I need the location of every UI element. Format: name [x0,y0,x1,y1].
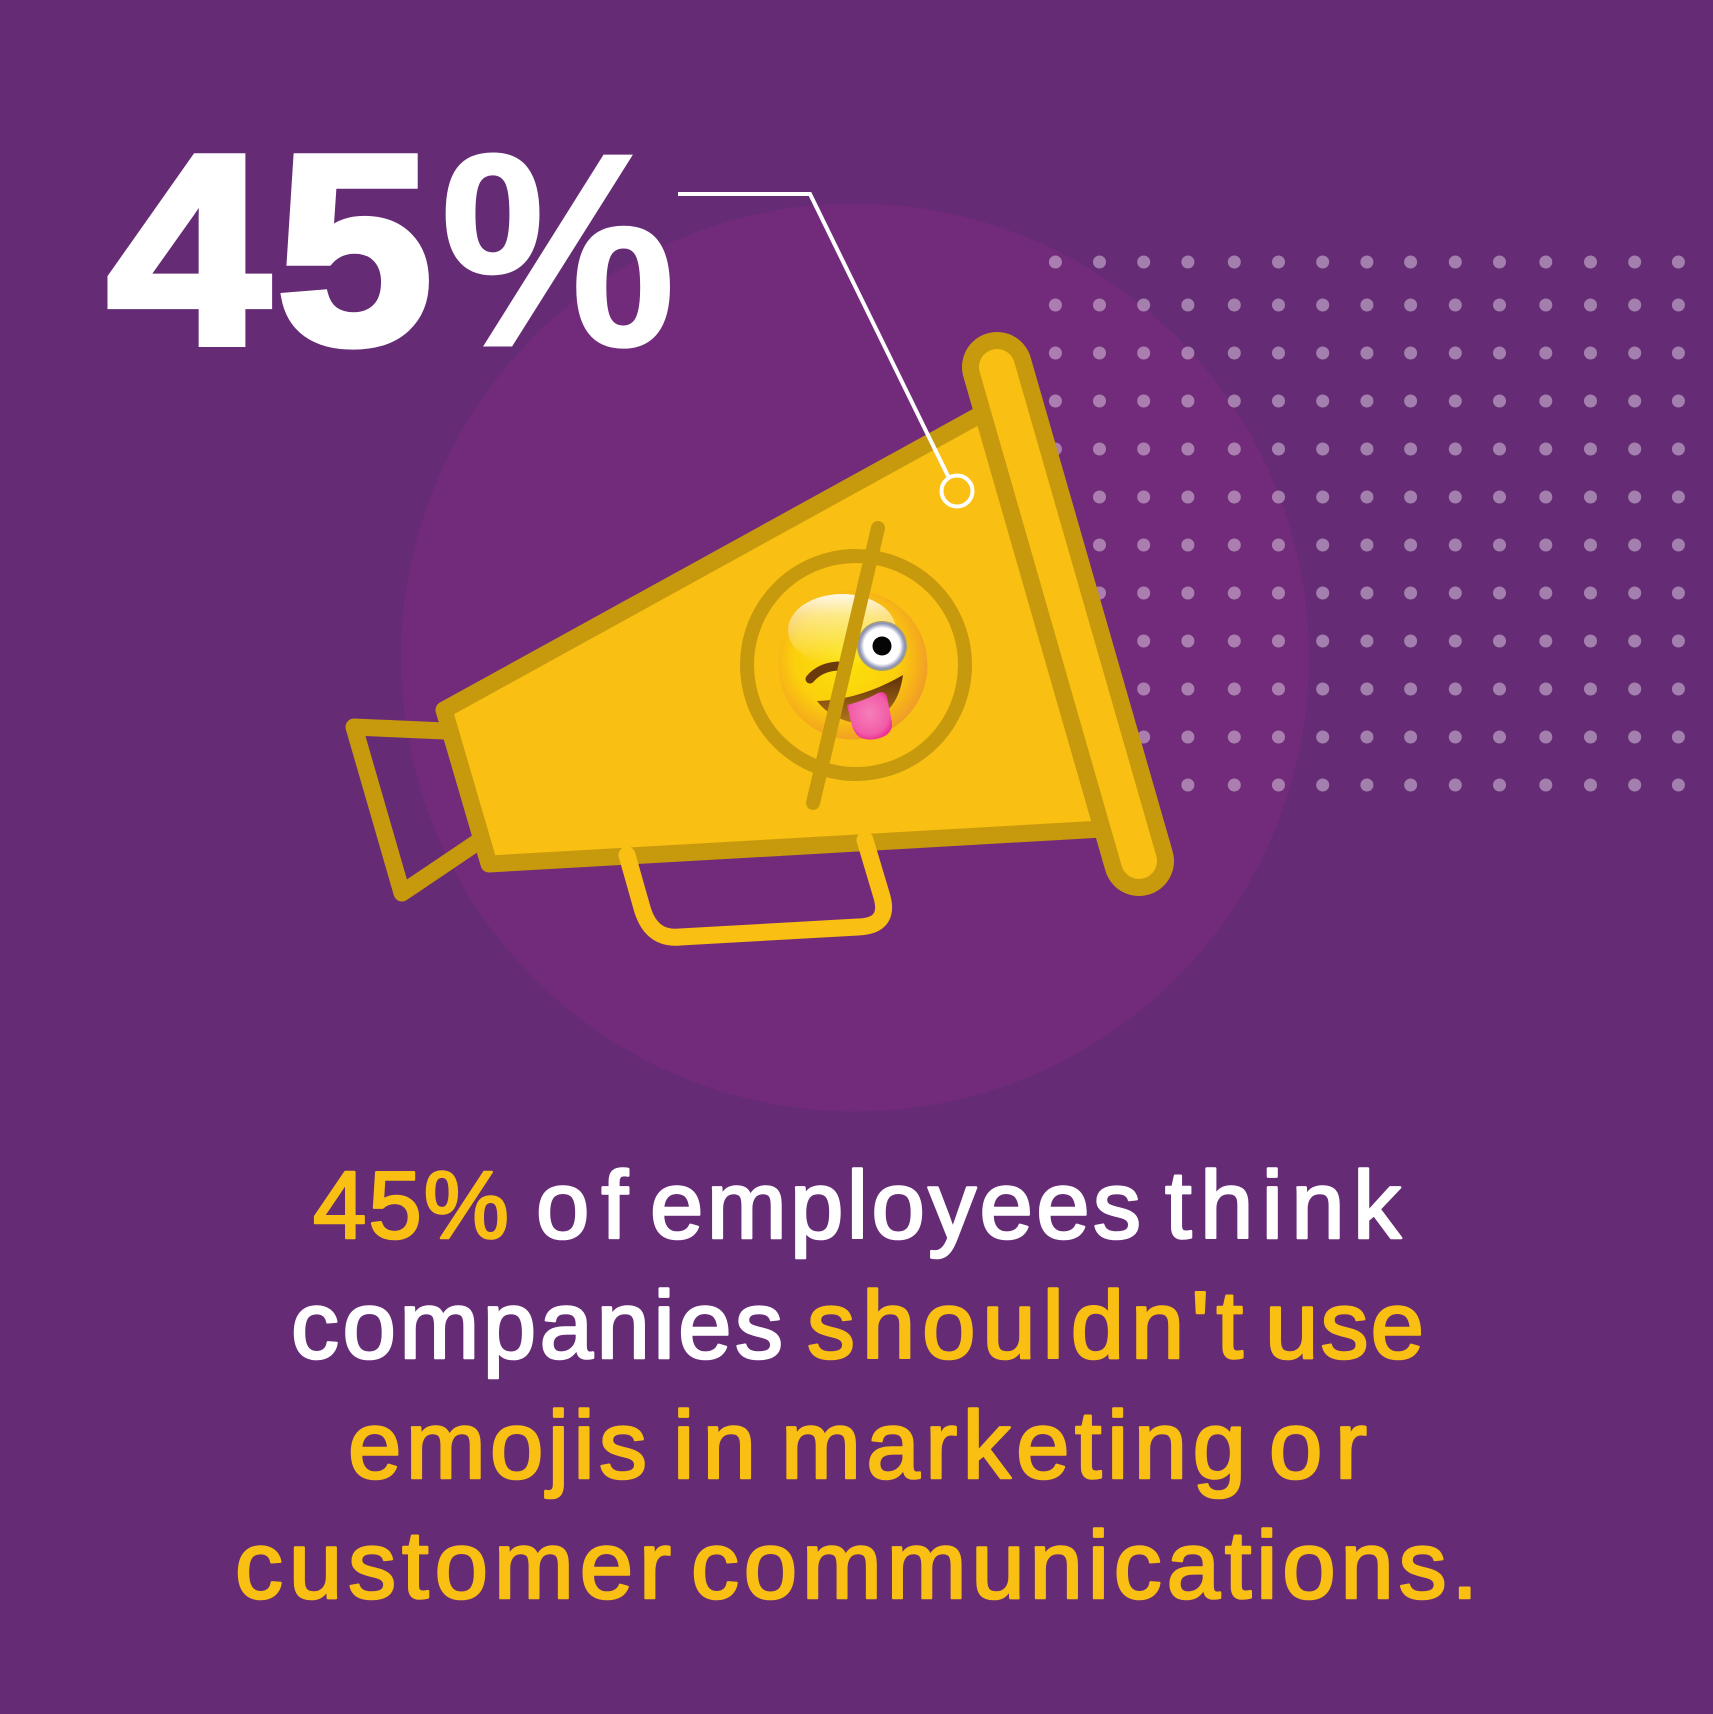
leader end marker [942,476,972,506]
caption line 3: or [1269,1392,1367,1499]
dot pattern [1049,256,1685,792]
background circle [401,204,1309,1112]
caption line 2: shouldn't [807,1272,1243,1379]
emoji open eye [857,621,907,671]
caption [235,1152,1478,1619]
emoji mouth [817,675,903,722]
icon: winking emoji with tongue out [778,590,928,740]
caption line 2 [291,1272,1424,1379]
caption line 3: in [673,1392,756,1499]
megaphone body [444,401,1120,864]
caption line 2: companies [291,1272,783,1379]
big statistic [107,96,676,404]
prohibition ring [747,556,965,774]
leader line [678,194,972,506]
caption line 4 [235,1512,1478,1619]
big statistic: 4 [107,100,271,401]
caption line 3: marketing [781,1392,1246,1499]
caption line 1: 45% [313,1152,509,1259]
caption line 3 [348,1392,1367,1499]
caption line 3: emojis [348,1392,647,1499]
caption line 1 [313,1152,1402,1259]
caption line 2: use [1265,1272,1424,1379]
caption line 1: think [1165,1152,1402,1259]
emoji winking eye [810,666,838,679]
megaphone bell rim [997,367,1139,861]
megaphone tail [354,727,485,893]
prohibition slash [813,528,878,803]
megaphone handle [627,840,884,937]
caption line 1: of [536,1152,628,1259]
emoji tongue [847,692,892,740]
big statistic: % [440,96,676,404]
caption line 4: communications. [691,1512,1478,1619]
caption line 1: employees [650,1152,1141,1259]
caption line 4: customer [235,1512,671,1619]
megaphone illustration [354,367,1139,937]
big statistic: 5 [277,100,433,401]
